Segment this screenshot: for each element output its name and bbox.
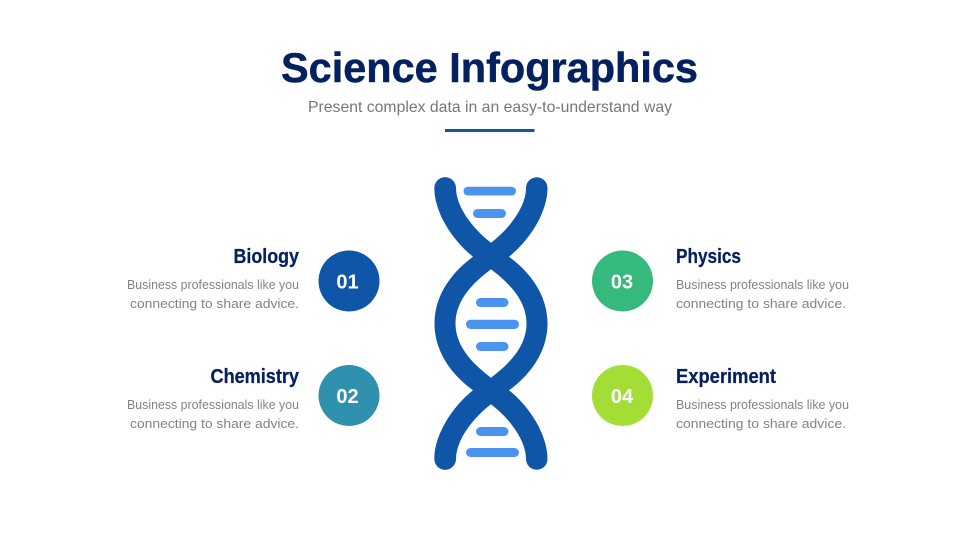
DNA base pairs: [464, 187, 519, 457]
icon: DNA helix: [434, 177, 548, 470]
text: Chemistry description: connecting to share advice.: [130, 416, 299, 431]
text: Physics description: Business professionals like you: [676, 277, 849, 292]
heading: Biology: Biology: [234, 246, 300, 268]
number badge 04: 04: [611, 386, 634, 408]
number badge 01: 01: [336, 271, 359, 293]
text: Experiment description: Business professionals like you: [676, 397, 849, 412]
heading: Chemistry: Chemistry: [210, 366, 300, 388]
number badge 03: [592, 250, 653, 312]
title: Science Infographics: [281, 44, 698, 91]
text: Biology description: [127, 277, 299, 311]
heading: Physics: Physics: [676, 246, 741, 268]
item 04: Experiment: [592, 365, 849, 431]
text: Biology description: connecting to share advice.: [130, 296, 299, 311]
number badge 02: 02: [336, 386, 359, 408]
item 02: Chemistry: [127, 365, 380, 431]
number badge 04: [592, 365, 653, 426]
text: Experiment description: [676, 397, 849, 431]
number badge 03: 03: [611, 271, 633, 293]
item 03: Physics: [592, 246, 849, 312]
text: Chemistry description: Business professionals like you: [127, 397, 299, 412]
text: Physics description: [676, 277, 849, 311]
text: Chemistry description: [127, 397, 299, 431]
text: Physics description: connecting to share advice.: [676, 296, 846, 311]
subtitle: Present complex data in an easy-to-understand way: [308, 99, 672, 116]
number badge 01: [318, 250, 380, 312]
text: Experiment description: connecting to share advice.: [676, 416, 846, 431]
heading: Experiment: Experiment: [676, 366, 776, 388]
title underline: [445, 129, 534, 132]
text: Biology description: Business professionals like you: [127, 277, 299, 292]
item 01: Biology: [127, 246, 380, 312]
DNA strands: [434, 177, 548, 470]
number badge 02: [318, 365, 380, 426]
